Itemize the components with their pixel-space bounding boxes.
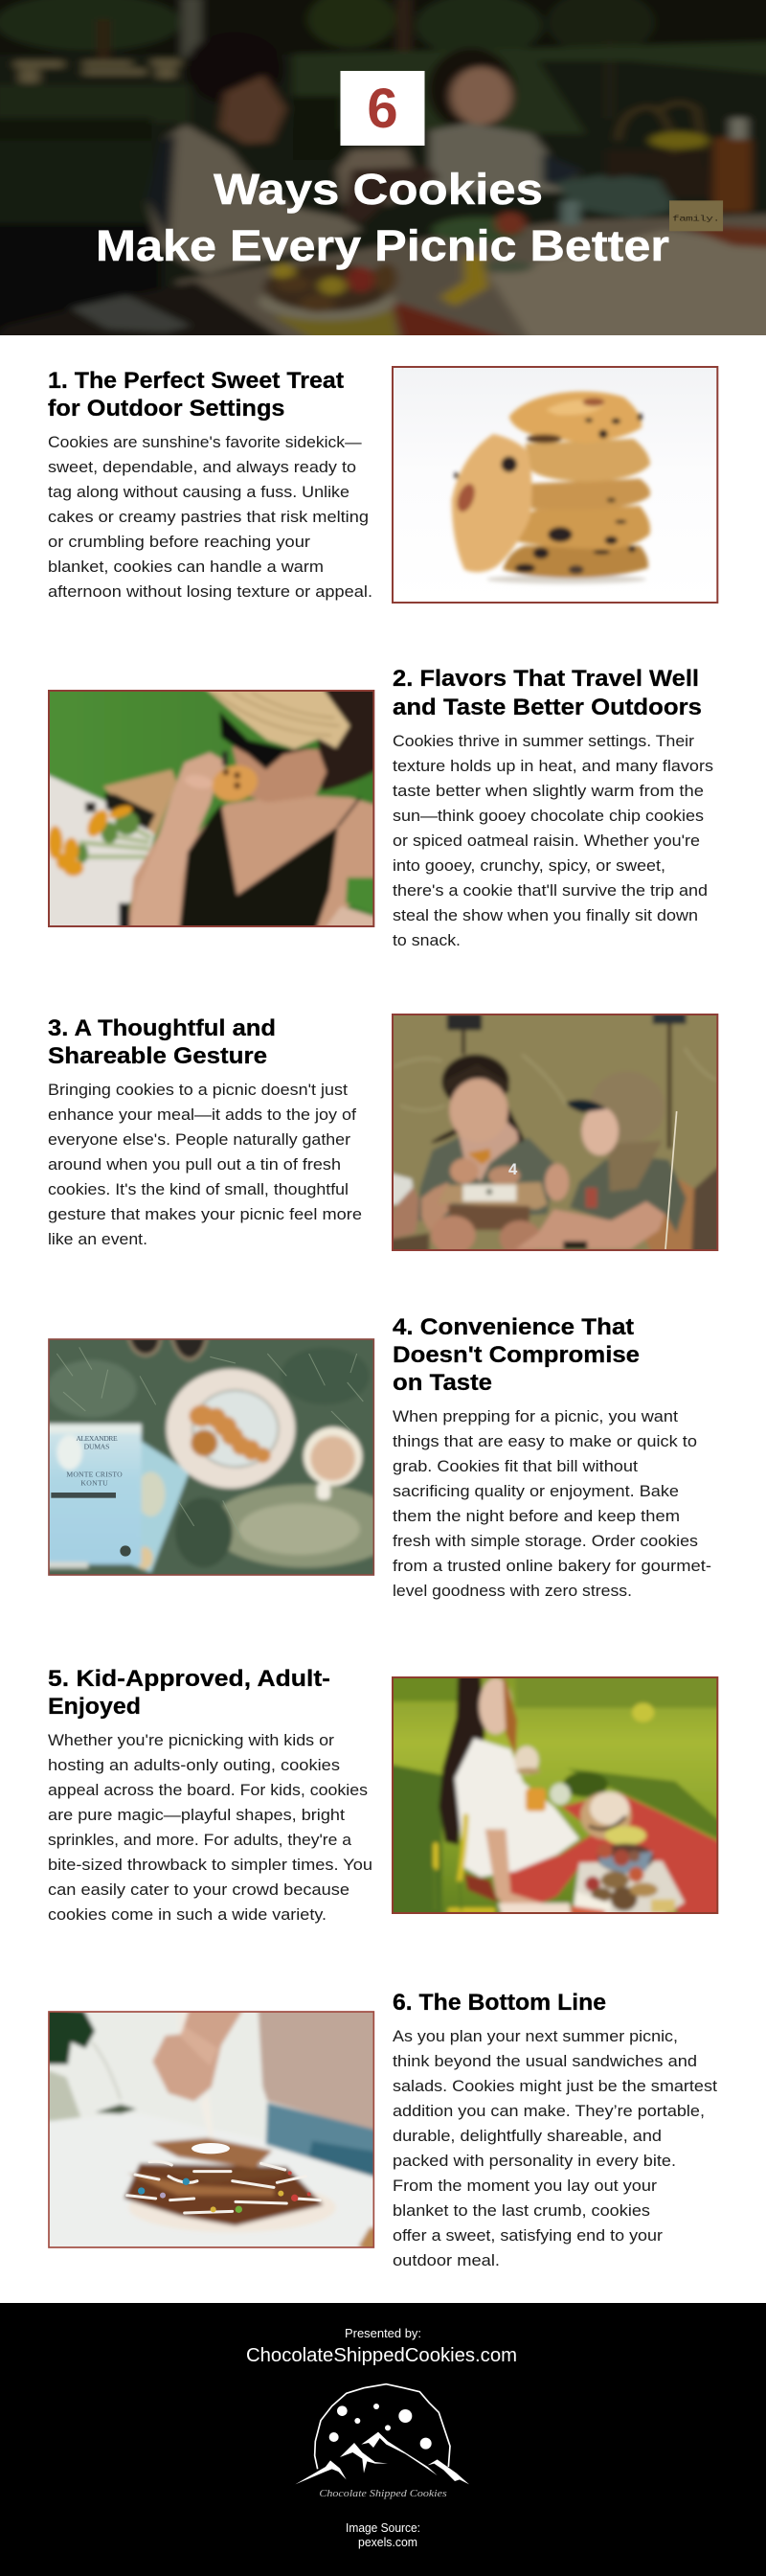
body text 3: around when you pull out a tin of fresh: [48, 1156, 341, 1174]
body text 5: hosting an adults-only outing, cookies: [48, 1757, 340, 1774]
body text 4: fresh with simple storage. Order cookies: [393, 1533, 698, 1550]
heading 2: and Taste Better Outdoors: [393, 695, 702, 720]
heading 3: [48, 1015, 276, 1069]
body text 6: packed with personality in every bite.: [393, 2153, 676, 2170]
body text 6: salads. Cookies might just be the smartest: [393, 2078, 717, 2095]
body text 4: sacrificing quality or enjoyment. Bake: [393, 1483, 679, 1500]
body text 4: from a trusted online bakery for gourmet-: [393, 1558, 711, 1575]
body text 6: blanket to the last crumb, cookies: [393, 2202, 650, 2220]
body text 6: think beyond the usual sandwiches and: [393, 2053, 697, 2070]
body text 3: like an event.: [48, 1231, 147, 1248]
body text 5: bite-sized throwback to simpler times. You: [48, 1857, 372, 1874]
heading 3: Shareable Gesture: [48, 1043, 267, 1069]
body text 1: cakes or creamy pastries that risk melting: [48, 509, 369, 526]
body text 1: tag along without causing a fuss. Unlike: [48, 484, 349, 501]
photo: two scouts sharing cookies: [392, 1014, 718, 1251]
hero banner: [0, 0, 766, 352]
panel: section 1: [48, 367, 717, 603]
body text 1: sweet, dependable, and always ready to: [48, 459, 356, 476]
image source: pexels.com: [358, 2535, 417, 2549]
body text 4: things that are easy to make or quick to: [393, 1433, 697, 1450]
body text 6: durable, delightfully shareable, and: [393, 2128, 662, 2145]
heading 1: 1. The Perfect Sweet Treat: [48, 368, 344, 394]
baskets and bottle: [557, 174, 674, 218]
body text 2: to snack.: [393, 932, 461, 949]
heading 5: 5. Kid-Approved, Adult-: [48, 1666, 330, 1692]
benches: [14, 59, 181, 83]
panel: section 2: [34, 666, 713, 949]
panel: section 4: [34, 1314, 711, 1600]
body text 1: Cookies are sunshine's favorite sidekick—: [48, 434, 362, 451]
body text 3: enhance your meal—it adds to the joy of: [48, 1106, 356, 1124]
body text 5: can easily cater to your crowd because: [48, 1881, 349, 1899]
heading 1: [48, 368, 344, 422]
body text 5: [48, 1732, 372, 1924]
table: [176, 214, 766, 352]
photo: woman picnicking on a red blanket: [392, 1676, 718, 1914]
photo: cookies, book and tea on the grass: ALEXANDRE: [76, 1434, 118, 1443]
body text 1: blanket, cookies can handle a warm: [48, 559, 324, 576]
body text 1: or crumbling before reaching your: [48, 534, 311, 551]
heading 4: 4. Convenience That: [393, 1314, 634, 1340]
body text 5: Whether you're picnicking with kids or: [48, 1732, 335, 1749]
photo: cookies, book and tea on the grass: KONTU: [80, 1478, 108, 1487]
image source: Image Source:: [346, 2520, 420, 2535]
photo: two scouts sharing cookies: 4: [508, 1160, 518, 1178]
heading 4: [393, 1314, 640, 1396]
logo: cookie and mountains: [295, 2384, 469, 2499]
body text 4: When prepping for a picnic, you want: [393, 1408, 678, 1425]
body text 1: [48, 434, 372, 601]
body text 2: steal the show when you finally sit down: [393, 907, 698, 924]
heading 5: Enjoyed: [48, 1694, 141, 1720]
presented by: Presented by:: [345, 2326, 421, 2340]
body text 5: cookies come in such a wide variety.: [48, 1906, 327, 1924]
heading 5: [48, 1666, 330, 1720]
body text 6: As you plan your next summer picnic,: [393, 2028, 678, 2045]
presented by: ChocolateShippedCookies.com: [246, 2344, 517, 2366]
body text 6: From the moment you lay out your: [393, 2177, 658, 2195]
image source: [346, 2520, 420, 2549]
heading 3: 3. A Thoughtful and: [48, 1015, 276, 1041]
body text 2: Cookies thrive in summer settings. Their: [393, 733, 695, 750]
photo: piping icing on gingerbread cookies: [48, 2011, 375, 2248]
body text 5: appeal across the board. For kids, cookies: [48, 1782, 368, 1799]
hero photo: family picnic: [0, 0, 766, 352]
body text 4: level goodness with zero stress.: [393, 1583, 632, 1600]
bananas and watermelon: [439, 256, 488, 307]
heading 1: for Outdoor Settings: [48, 396, 285, 422]
plate of cookies and fruit: [257, 293, 400, 325]
woman: [427, 48, 515, 131]
body text 5: sprinkles, and more. For adults, they're a: [48, 1832, 352, 1849]
heading 2: 2. Flavors That Travel Well: [393, 666, 699, 692]
photo: cookies, book and tea on the grass: DUMAS: [84, 1442, 109, 1450]
body text 6: addition you can make. They’re portable,: [393, 2103, 705, 2120]
body text 2: [393, 733, 713, 949]
body text 3: cookies. It's the kind of small, thoughtful: [48, 1181, 349, 1198]
body text 6: offer a sweet, satisfying end to your: [393, 2227, 664, 2245]
hero photo: family picnic: family.: [672, 215, 720, 224]
second child: [645, 1179, 697, 1249]
body text 2: sun—think gooey chocolate chip cookies: [393, 808, 704, 825]
heading 6: 6. The Bottom Line: [393, 1990, 606, 2016]
title: Make Every Picnic Better: [96, 221, 669, 270]
photo: woman eating a cookie: [48, 690, 375, 927]
body text 2: there's a cookie that'll survive the trip and: [393, 882, 708, 900]
footer: [0, 2303, 766, 2576]
body text 6: [393, 2028, 717, 2269]
photo: stack of cookies: [393, 367, 717, 603]
body text 2: or spiced oatmeal raisin. Whether you're: [393, 832, 700, 850]
logo wordmark: Chocolate Shipped Cookies: [319, 2489, 447, 2499]
body text 2: taste better when slightly warm from the: [393, 783, 704, 800]
photo: cookies, book and tea on the grass: [48, 1338, 375, 1576]
body text 1: afternoon without losing texture or appeal.: [48, 583, 372, 601]
body text 3: [48, 1082, 362, 1248]
body text 2: texture holds up in heat, and many flavors: [393, 758, 713, 775]
photo: cookies, book and tea on the grass: MONTE CRISTO: [66, 1470, 123, 1478]
panel: section 5: [48, 1663, 732, 1928]
title: [96, 165, 669, 270]
body text 4: grab. Cookies fit that bill without: [393, 1458, 638, 1475]
body text 4: [393, 1408, 711, 1600]
presented by: [246, 2326, 517, 2366]
child: [337, 148, 416, 204]
heading 4: Doesn't Compromise: [393, 1342, 640, 1368]
body text 3: Bringing cookies to a picnic doesn't just: [48, 1082, 348, 1099]
number badge: 6: [367, 78, 398, 140]
panel: section 6: [34, 1990, 717, 2269]
body text 6: outdoor meal.: [393, 2252, 500, 2269]
body text 2: into gooey, crunchy, spicy, or sweet,: [393, 857, 665, 875]
man: [146, 125, 362, 275]
body text 4: them the night before and keep them: [393, 1508, 680, 1525]
body text 3: everyone else's. People naturally gather: [48, 1131, 351, 1149]
body text 3: gesture that makes your picnic feel more: [48, 1206, 362, 1223]
heading 4: on Taste: [393, 1370, 492, 1396]
title: Ways Cookies: [214, 165, 543, 214]
body text 5: are pure magic—playful shapes, bright: [48, 1807, 345, 1824]
heading 2: [393, 666, 702, 720]
panel: section 3: [48, 1014, 718, 1251]
number badge: [341, 71, 425, 146]
